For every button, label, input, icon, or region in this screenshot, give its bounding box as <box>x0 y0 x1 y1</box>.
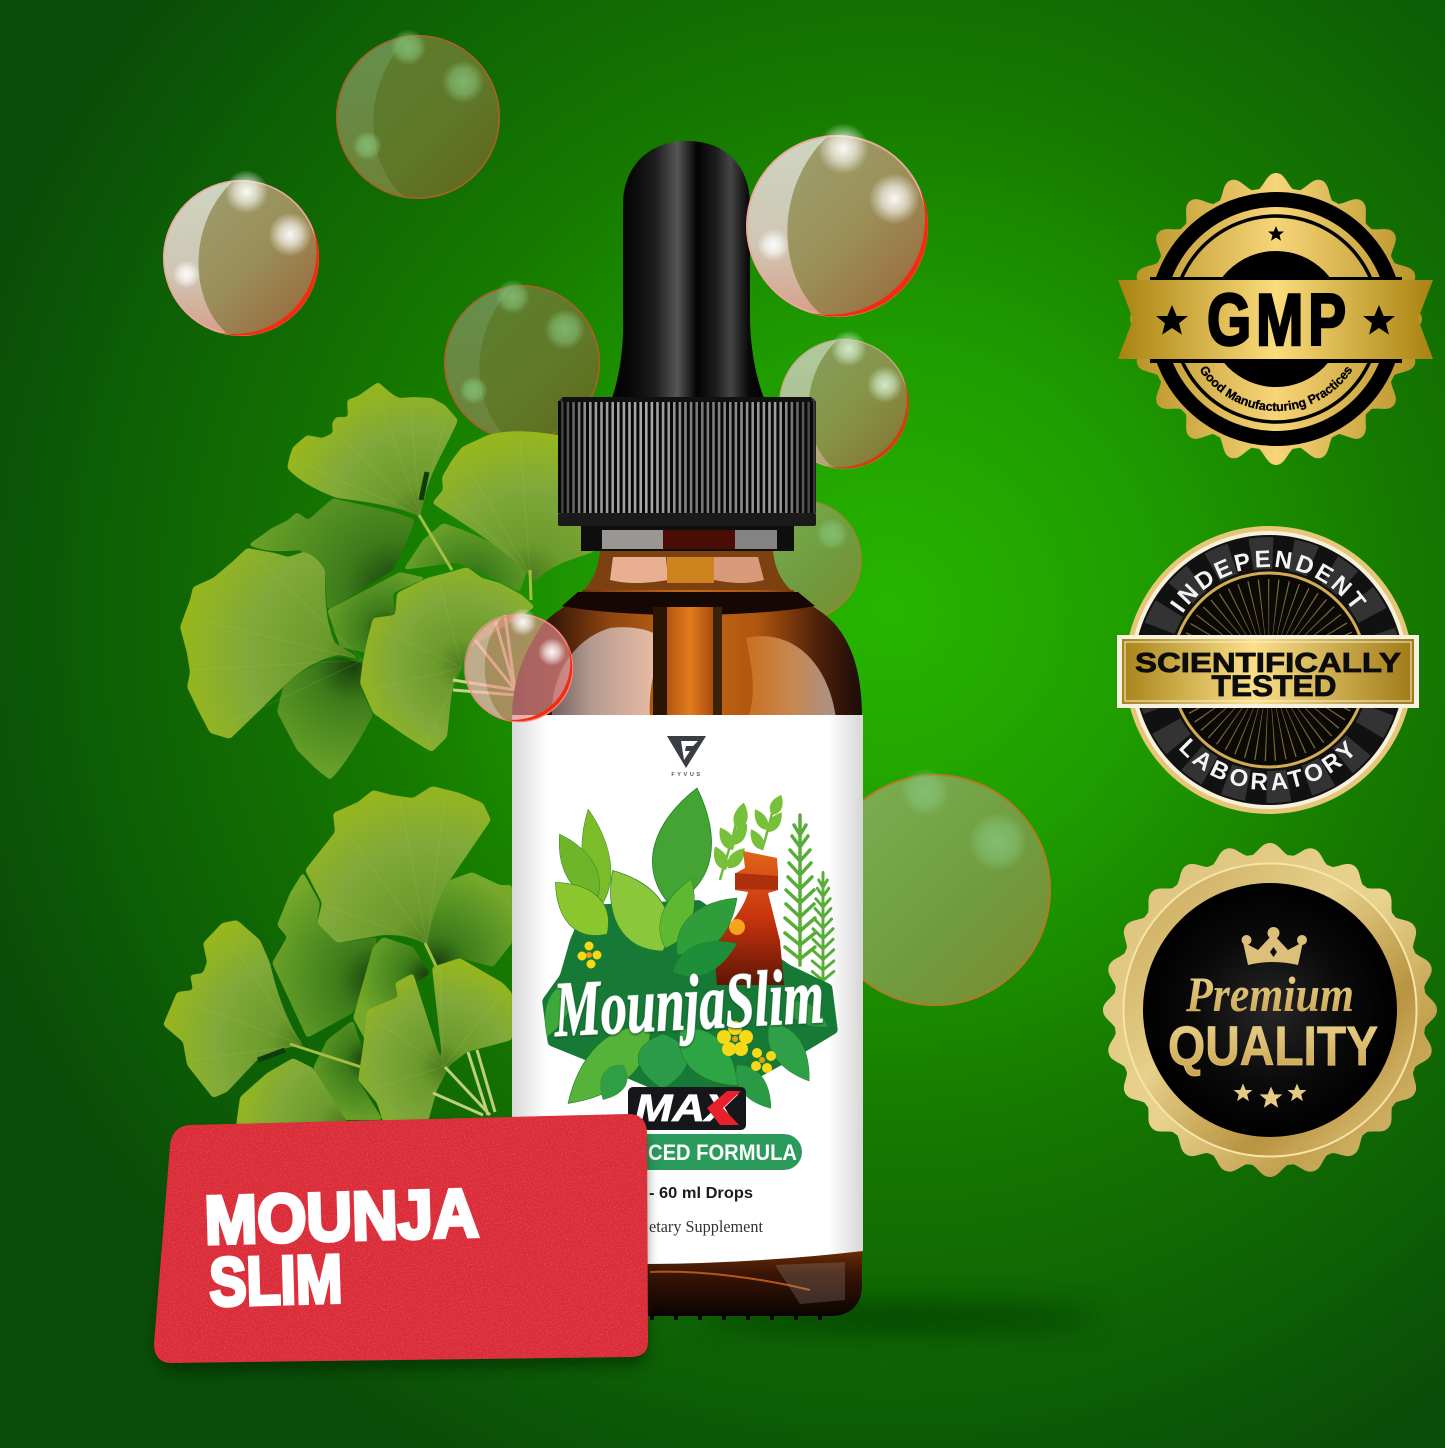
arc text bottom: LABORATORY <box>1178 738 1353 790</box>
ring segments <box>1152 553 1386 787</box>
card title: MOUNJA <box>204 1175 480 1259</box>
leaf: small centre <box>327 572 427 653</box>
ribbon text: SCIENTIFICALLY <box>1135 647 1401 678</box>
black ring <box>1134 535 1404 805</box>
outer seal <box>1125 526 1413 814</box>
neck collar <box>581 526 794 551</box>
black centre <box>1143 883 1397 1137</box>
bubble: right of cap <box>779 331 909 469</box>
badge: scientifically tested <box>1117 526 1419 814</box>
three stars <box>1234 1084 1306 1108</box>
scalloped seal <box>1125 170 1427 468</box>
large leaves <box>537 782 833 1120</box>
leaf: lower middle <box>313 1020 383 1120</box>
amber glass body <box>512 590 862 1316</box>
motto: Good Manufacturing Practices <box>1200 366 1352 412</box>
leaf: left <box>163 920 303 1098</box>
gold ring <box>1124 864 1416 1156</box>
leaf: top <box>287 382 458 517</box>
bubble: top left <box>163 170 319 336</box>
MAX badge <box>628 1087 746 1130</box>
leaf: lower right <box>358 958 512 1122</box>
leaf cluster: top <box>180 382 594 780</box>
leaf: rear left <box>248 498 415 610</box>
leaf: right centre <box>360 567 535 752</box>
ring highlight <box>1124 864 1416 1156</box>
pipette <box>653 607 722 718</box>
MAX badge: MAX <box>635 1088 738 1130</box>
leaf: left rear <box>272 872 377 1038</box>
leaf: right rear <box>427 872 512 967</box>
amber neck <box>582 551 793 592</box>
product name: MounjaSlim <box>550 952 826 1053</box>
fern sprigs <box>785 815 834 985</box>
ribbon text: TESTED <box>1212 670 1336 703</box>
red brand card <box>154 1114 648 1363</box>
leaf: lower <box>277 657 373 780</box>
inner gold ring <box>1172 573 1366 767</box>
volume text: - 60 ml Drops <box>649 1185 753 1202</box>
leaf: large left <box>180 548 363 739</box>
formula pill <box>600 1134 802 1170</box>
glass reflection left <box>552 627 664 718</box>
bubble: large lower right <box>820 768 1050 1005</box>
bubble: front of bottle <box>464 608 573 722</box>
brand logo <box>667 736 706 778</box>
badge: GMP <box>1118 173 1433 465</box>
leaf cluster: bottom <box>163 786 512 1126</box>
product bottle <box>512 141 863 1318</box>
leaf: small middle <box>353 937 430 1043</box>
stems: bottom <box>433 1050 495 1115</box>
brand logo: FYVUS <box>671 772 703 778</box>
glass reflection right <box>746 636 836 718</box>
GMP text: GMP <box>1207 279 1351 361</box>
bubble: behind leaf <box>444 280 600 441</box>
ribbon stars <box>1156 305 1188 335</box>
dark stem shadow <box>258 1050 285 1060</box>
bottle label <box>512 715 863 1264</box>
quality text: QUALITY <box>1168 1014 1378 1077</box>
stem: top leaf <box>419 515 452 570</box>
leaf: right <box>432 431 594 582</box>
bubble: top centre <box>336 29 500 199</box>
formula pill: CED FORMULA <box>648 1140 797 1165</box>
leaf: lower left <box>236 1058 350 1126</box>
dark band at shoulder <box>562 592 815 615</box>
ribbed cap <box>558 397 816 526</box>
bottle base <box>512 1250 862 1318</box>
red bottle illustration <box>713 851 784 985</box>
leaf: rear right <box>403 523 527 592</box>
dropper bulb <box>612 141 764 398</box>
ribbon text <box>1135 647 1401 703</box>
stem: left leaf <box>290 1044 361 1067</box>
arc text top: INDEPENDENT <box>1170 550 1367 613</box>
stem: top leaf <box>425 943 436 966</box>
bottle shadow <box>700 1305 1100 1331</box>
top star <box>1268 226 1284 241</box>
dark stem shadow <box>421 472 427 500</box>
bubble: behind shoulder <box>741 500 861 620</box>
card title: SLIM <box>208 1241 343 1321</box>
white ring <box>1130 531 1408 809</box>
ribbon edge bands <box>1150 277 1402 363</box>
sunburst <box>1214 615 1324 725</box>
crown <box>1242 927 1307 965</box>
rings <box>1156 200 1396 438</box>
ribbon <box>1118 280 1433 359</box>
dark foliage mass <box>542 900 838 1088</box>
premium script: Premium <box>1185 966 1354 1022</box>
flowers <box>578 942 776 1073</box>
bubble: beside dropper <box>746 123 928 317</box>
ribbon <box>1117 635 1419 708</box>
badge: premium quality <box>1100 840 1440 1180</box>
card title <box>204 1175 481 1321</box>
herbal illustration <box>537 782 838 1120</box>
scalloped seal <box>1100 840 1440 1180</box>
card shadow <box>154 1124 647 1373</box>
stems: lower <box>453 615 515 695</box>
supplement text: etary Supplement <box>649 1217 763 1236</box>
stem: right leaf <box>530 570 531 600</box>
leaf: top <box>305 786 491 945</box>
thin sprigs <box>709 793 787 880</box>
